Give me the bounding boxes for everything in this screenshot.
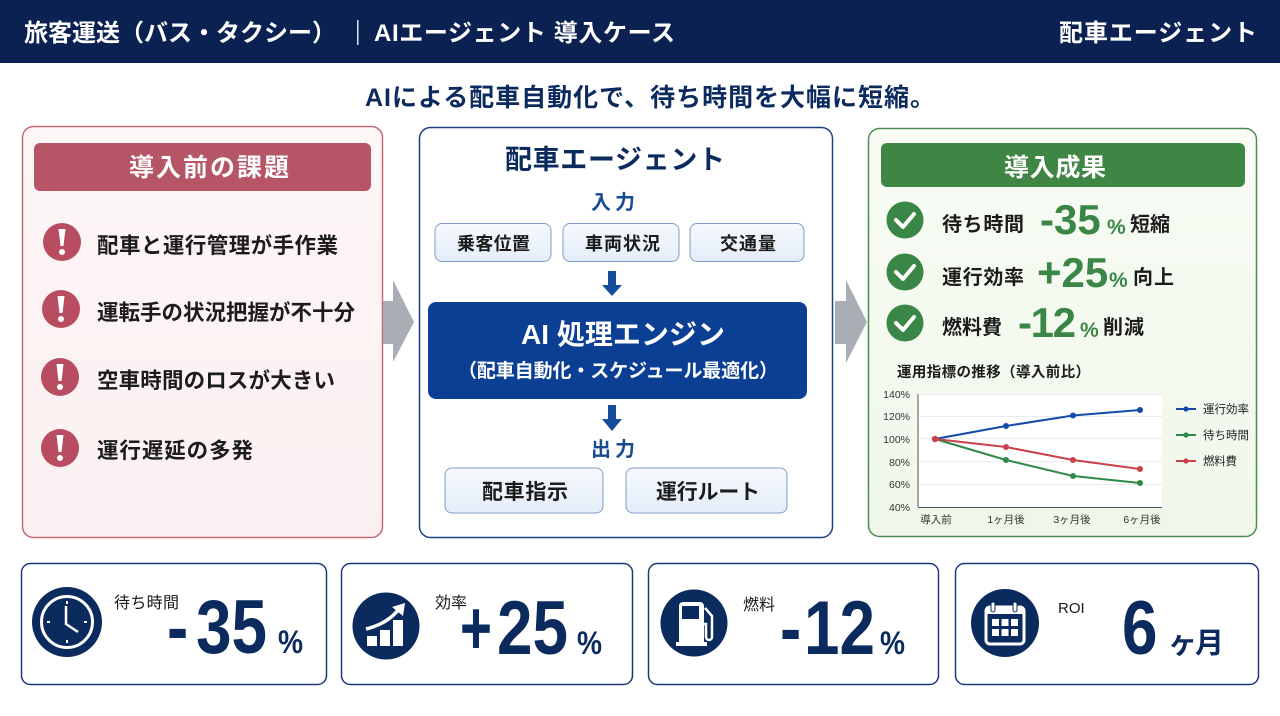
result: fuel cost: 燃料費 bbox=[942, 316, 1002, 339]
arrow: challenges to agent bbox=[383, 280, 414, 362]
arrow: engine to output bbox=[602, 405, 622, 431]
value bbox=[167, 584, 303, 669]
challenge 2 bbox=[42, 290, 355, 328]
panel: before challenges bbox=[22, 126, 382, 538]
challenge 1 bbox=[43, 223, 338, 261]
value: 35 bbox=[196, 584, 267, 669]
x axis labels: 導入前 bbox=[920, 513, 952, 526]
challenge 3 bbox=[41, 358, 335, 396]
panel heading: 導入前の課題 bbox=[129, 154, 289, 182]
result: wait time: -35 bbox=[1040, 196, 1101, 243]
value bbox=[1122, 585, 1224, 670]
result: wait time: 短縮 bbox=[1130, 213, 1170, 236]
input: passenger location bbox=[435, 224, 551, 262]
x axis labels: 6ヶ月後 bbox=[1123, 513, 1161, 526]
legend: 燃料費 bbox=[1203, 454, 1237, 468]
value: ヶ月 bbox=[1168, 628, 1224, 660]
series: wait time bbox=[935, 439, 1143, 486]
input: vehicle status: 車両状況 bbox=[585, 234, 660, 254]
result: wait time: % bbox=[1107, 216, 1126, 239]
series: fuel cost bbox=[932, 436, 1143, 472]
x axis labels: 3ヶ月後 bbox=[1053, 513, 1091, 526]
headline: AIによる配車自動化で、待ち時間を大幅に短縮。 bbox=[365, 84, 935, 112]
KPI card: wait time: 待ち時間 bbox=[114, 594, 179, 612]
panel: dispatch agent bbox=[420, 128, 832, 538]
x axis labels: 1ヶ月後 bbox=[987, 513, 1025, 526]
result: wait time: 待ち時間 bbox=[942, 213, 1024, 236]
input: passenger location: 乗客位置 bbox=[457, 234, 530, 254]
chart title: 運用指標の推移（導入前比） bbox=[897, 363, 1090, 381]
KPI card: fuel: 燃料 bbox=[743, 596, 775, 614]
y axis labels: 40% bbox=[889, 502, 910, 514]
KPI card: ROI: ROI bbox=[1058, 600, 1085, 617]
result: operating efficiency: +25 bbox=[1037, 249, 1108, 296]
value: - bbox=[780, 585, 801, 670]
output: route: 運行ルート bbox=[656, 481, 760, 504]
y axis labels: 140% bbox=[883, 389, 910, 401]
y axis labels bbox=[883, 389, 910, 514]
KPI card: efficiency bbox=[342, 564, 632, 684]
AI engine: AI 処理エンジン bbox=[521, 319, 725, 350]
value: 25 bbox=[497, 585, 568, 670]
line chart bbox=[883, 363, 1249, 526]
legend bbox=[1176, 403, 1249, 468]
value: 6 bbox=[1122, 585, 1158, 670]
output: dispatch instruction bbox=[445, 468, 603, 513]
KPI card: ROI bbox=[956, 564, 1258, 684]
result: fuel cost: 削減 bbox=[1103, 315, 1144, 339]
panel: results bbox=[868, 128, 1256, 536]
y axis labels: 60% bbox=[889, 479, 910, 491]
value: + bbox=[460, 586, 492, 671]
challenge 2: 運転手の状況把握が不十分 bbox=[97, 300, 355, 325]
challenge 1: 配車と運行管理が手作業 bbox=[97, 233, 338, 258]
result: operating efficiency bbox=[886, 249, 1174, 296]
input: vehicle status bbox=[563, 224, 679, 262]
output: dispatch instruction: 配車指示 bbox=[482, 481, 568, 504]
AI engine bbox=[428, 302, 807, 399]
challenge 3: 空車時間のロスが大きい bbox=[97, 368, 335, 393]
value: % bbox=[880, 625, 905, 661]
legend: 運行効率 bbox=[1203, 403, 1249, 416]
value bbox=[460, 585, 602, 671]
icon: growth chart bbox=[352, 592, 420, 660]
value bbox=[780, 585, 905, 670]
header bar bbox=[0, 0, 1280, 63]
output label: 出力 bbox=[591, 438, 635, 461]
series: operating efficiency bbox=[935, 407, 1143, 439]
panel heading: 導入成果 bbox=[1004, 154, 1106, 182]
value: - bbox=[167, 584, 188, 669]
output: route bbox=[626, 468, 787, 513]
result: fuel cost bbox=[886, 299, 1144, 346]
result: operating efficiency: 運行効率 bbox=[942, 266, 1024, 289]
x axis labels bbox=[920, 513, 1161, 526]
challenge 4: 運行遅延の多発 bbox=[97, 439, 253, 463]
AI engine: （配車自動化・スケジュール最適化） bbox=[458, 360, 778, 382]
value: % bbox=[577, 625, 602, 661]
icon: fuel pump bbox=[660, 590, 728, 656]
agent name: 配車エージェント bbox=[1059, 20, 1257, 47]
icon: calendar bbox=[971, 589, 1039, 657]
y axis labels: 100% bbox=[883, 434, 910, 446]
result: operating efficiency: 向上 bbox=[1133, 266, 1174, 289]
result: wait time bbox=[886, 196, 1170, 243]
KPI card: efficiency: 効率 bbox=[435, 594, 467, 612]
icon: clock bbox=[32, 587, 102, 657]
input label: 入力 bbox=[591, 191, 635, 214]
challenge 4 bbox=[41, 429, 253, 467]
panel heading: 配車エージェント bbox=[505, 145, 725, 175]
arrow: input to engine bbox=[602, 271, 622, 296]
legend: 待ち時間 bbox=[1203, 428, 1249, 442]
panel heading bbox=[34, 143, 371, 191]
arrow: agent to results bbox=[835, 280, 867, 363]
y axis labels: 120% bbox=[883, 411, 910, 423]
input: traffic volume: 交通量 bbox=[720, 234, 776, 254]
KPI card: wait time bbox=[22, 564, 326, 684]
result: operating efficiency: % bbox=[1109, 269, 1128, 292]
result: fuel cost: % bbox=[1080, 319, 1099, 342]
result: fuel cost: -12 bbox=[1018, 299, 1076, 346]
value: % bbox=[278, 624, 303, 660]
KPI card: fuel bbox=[648, 564, 938, 684]
title: 旅客運送（バス・タクシー） bbox=[24, 20, 336, 47]
case name: AIエージェント 導入ケース bbox=[374, 20, 675, 47]
panel heading bbox=[881, 143, 1245, 187]
y axis labels: 80% bbox=[889, 457, 910, 469]
value: 12 bbox=[804, 585, 875, 670]
input: traffic volume bbox=[690, 224, 804, 262]
